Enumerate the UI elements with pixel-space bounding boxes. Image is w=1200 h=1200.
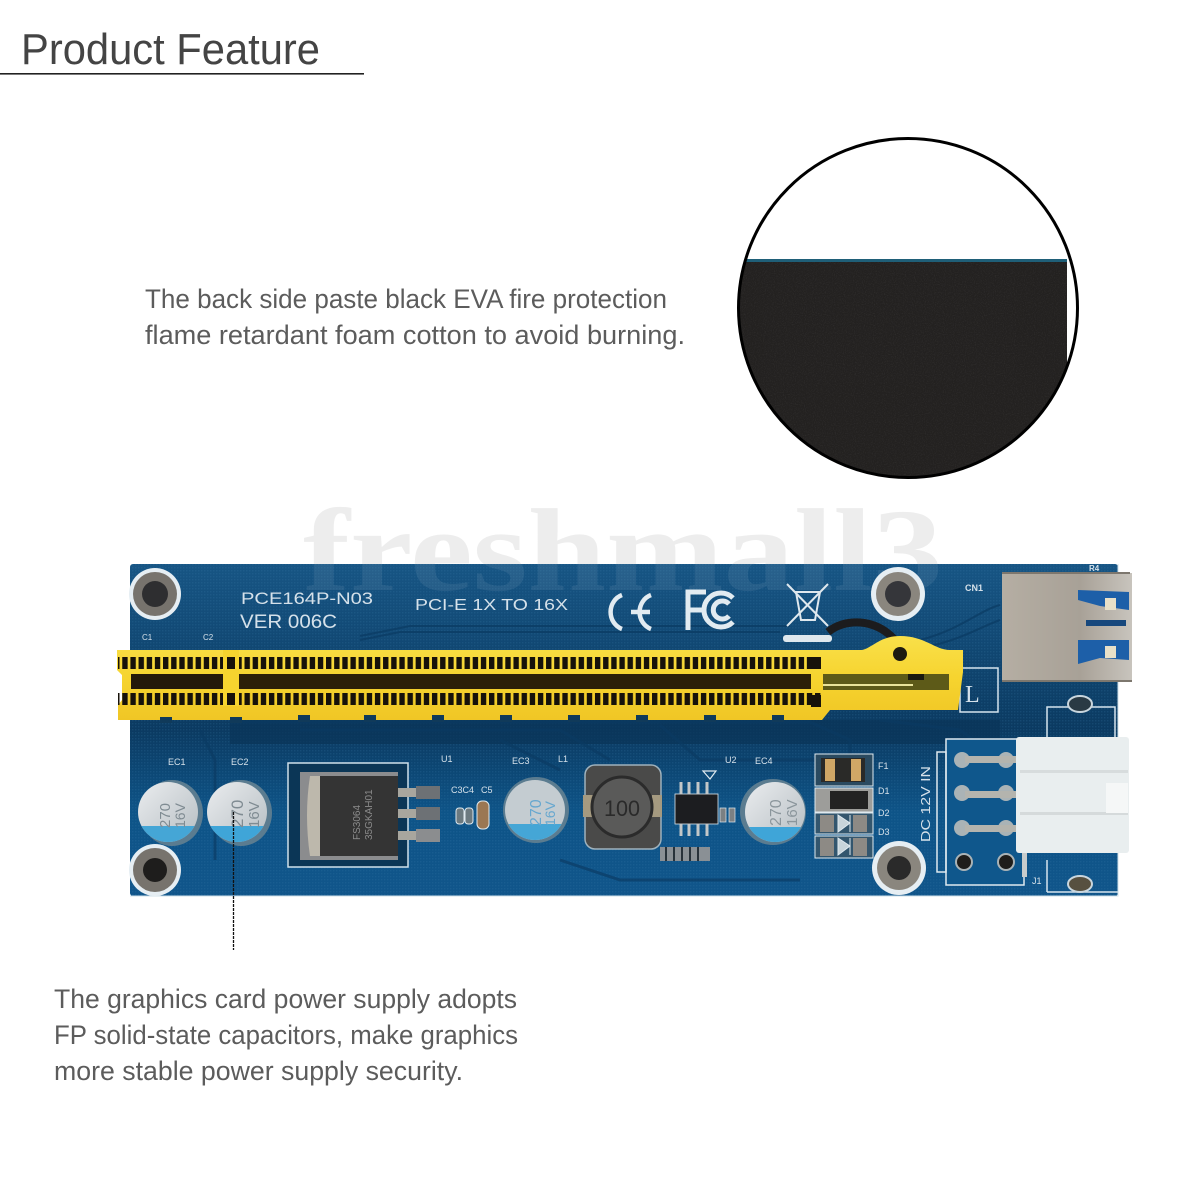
capacitor EC3: 16V	[542, 800, 558, 826]
silkscreen labels: D3	[878, 827, 890, 837]
FCC mark	[688, 592, 733, 630]
silkscreen labels: D1	[878, 786, 890, 796]
mounting holes	[129, 567, 926, 896]
silkscreen labels: VER 006C	[240, 612, 337, 633]
text block: foam description	[145, 284, 685, 350]
fuse and diodes	[815, 754, 873, 858]
pcb	[130, 564, 1118, 896]
text block: foam description: The back side paste black EVA fire protection	[145, 284, 667, 314]
IC U2	[660, 771, 735, 861]
silkscreen labels: D2	[878, 808, 890, 818]
silkscreen labels: CN1	[965, 583, 983, 593]
silkscreen labels: U1	[441, 754, 453, 764]
capacitor EC1: 16V	[172, 802, 188, 828]
capacitor EC2: 16V	[246, 801, 263, 828]
text block: capacitor description: FP solid-state capacitors, make graphics	[54, 1020, 518, 1050]
leader line	[232, 812, 234, 950]
silkscreen labels: EC3	[512, 756, 530, 766]
riser board photo	[117, 564, 1132, 896]
silkscreen labels: PCE164P-N03	[241, 589, 373, 608]
capacitor EC1: 270	[157, 803, 174, 828]
4-pin power connector	[937, 737, 1129, 885]
watermark: freshmall3	[303, 485, 943, 616]
MOSFET U1	[288, 763, 440, 867]
capacitor EC4: 270	[768, 799, 785, 826]
capacitor EC4: 16V	[784, 799, 801, 826]
capacitor EC3	[503, 777, 569, 844]
silkscreen labels: F1	[878, 761, 889, 771]
text block: capacitor description	[54, 984, 518, 1086]
silkscreen labels: PCI-E 1X TO 16X	[415, 597, 568, 614]
CE mark	[611, 595, 651, 629]
WEEE recycling mark	[783, 584, 832, 642]
USB 3.0 port	[1002, 573, 1132, 681]
inductor L1: 100	[604, 796, 640, 821]
PCIe 16x yellow slot	[117, 636, 963, 723]
silkscreen labels: L	[965, 682, 980, 708]
circular detail: black foam	[730, 138, 1078, 492]
capacitor EC1	[136, 780, 203, 846]
silkscreen labels: C3C4	[451, 785, 474, 795]
faint watermark over board: freshmall3	[303, 485, 943, 616]
silkscreen labels: L1	[558, 754, 568, 764]
MOSFET U1: FS3064	[352, 805, 363, 840]
silkscreen labels: R4	[1089, 564, 1100, 573]
capacitor EC4	[740, 779, 807, 847]
silkscreen labels: DC 12V IN	[918, 766, 933, 842]
silkscreen labels: U2	[725, 755, 737, 765]
text block: capacitor description: The graphics card power supply adopts	[54, 984, 517, 1014]
small SMD capacitors C3 C4 C5	[456, 801, 489, 829]
silkscreen labels: J1	[1032, 876, 1042, 886]
silkscreen labels: EC2	[231, 757, 249, 767]
silkscreen labels: EC1	[168, 757, 186, 767]
title: Product Feature	[21, 25, 320, 74]
text block: capacitor description: more stable power supply security.	[54, 1056, 463, 1086]
silkscreen labels: C5	[481, 785, 493, 795]
capacitor EC3: 270	[528, 799, 545, 826]
silkscreen labels	[142, 564, 1100, 886]
capacitor EC2	[205, 780, 272, 846]
silkscreen labels: C1	[142, 633, 153, 642]
capacitor EC2: 270	[228, 800, 247, 828]
MOSFET U1: 35GKAH01	[364, 789, 375, 840]
text block: foam description: flame retardant foam cotton to avoid burning.	[145, 320, 685, 350]
black cable	[828, 622, 895, 640]
silkscreen labels: C2	[203, 633, 214, 642]
inductor L1	[583, 765, 662, 849]
silkscreen labels: EC4	[755, 756, 773, 766]
